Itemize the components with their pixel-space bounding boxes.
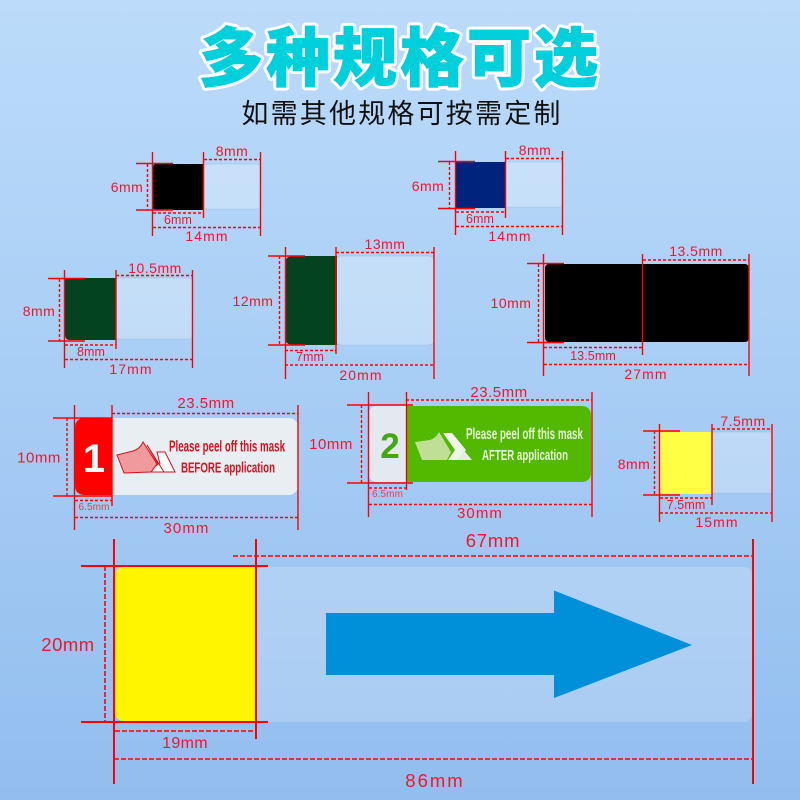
sticker: 30mm green peel label: Please peel off this mask: [466, 426, 583, 443]
sticker: 30mm red peel label: 1: [83, 437, 105, 481]
sticker: 86mm large with arrow: 20mm: [41, 634, 95, 655]
title: 多种规格可选: [199, 23, 601, 95]
sticker: 30mm green peel label: AFTER application: [482, 447, 568, 464]
sticker: 27mm black: [491, 243, 749, 382]
sticker: 30mm green peel label: [309, 384, 592, 522]
sticker: 27mm black: 13.5mm: [570, 349, 616, 363]
sticker: 20mm green: 13mm: [365, 236, 405, 252]
sticker: 27mm black: 10mm: [491, 295, 531, 311]
sticker: 20mm green: [233, 236, 434, 383]
sticker: 14mm navy: 14mm: [488, 228, 532, 244]
sticker: 27mm black: 13.5mm: [669, 243, 723, 259]
title: 多种规格可选: [199, 23, 601, 95]
sticker: 14mm black: 8mm: [216, 143, 248, 159]
sticker: 30mm red peel label: 30mm: [163, 520, 210, 537]
sticker: 14mm black: 6mm: [111, 179, 143, 195]
sticker: 17mm green: 8mm: [77, 345, 105, 359]
sticker: 30mm red peel label: [17, 395, 298, 537]
sticker: 86mm large with arrow: 86mm: [405, 770, 465, 791]
sticker: 30mm green peel label: 2: [380, 427, 400, 466]
sticker: 30mm green peel label: 6.5mm: [372, 489, 403, 500]
sticker: 14mm navy: 6mm: [412, 178, 444, 194]
sticker: 86mm large with arrow: 67mm: [466, 530, 520, 551]
sticker: 20mm green: 7mm: [296, 350, 324, 364]
sticker: 30mm red peel label: 23.5mm: [177, 395, 235, 412]
subtitle: 如需其他规格可按需定制: [241, 99, 563, 129]
sticker: 27mm black: 27mm: [624, 366, 668, 382]
sticker: 20mm green: 12mm: [233, 293, 273, 309]
sticker: 86mm large with arrow: [41, 530, 753, 791]
sticker: 15mm yellow: [618, 413, 772, 530]
sticker: 14mm navy: 6mm: [466, 212, 494, 226]
sticker: 15mm yellow: 7.5mm: [720, 413, 766, 429]
sticker: 14mm black: [111, 143, 260, 244]
sticker: 15mm yellow: 7.5mm: [667, 498, 705, 512]
sticker: 30mm red peel label: 10mm: [17, 450, 61, 466]
sticker: 17mm green: 8mm: [23, 303, 55, 319]
sticker: 15mm yellow: 15mm: [695, 514, 739, 530]
sticker: 20mm green: 20mm: [339, 367, 383, 383]
sticker: 30mm green peel label: 23.5mm: [470, 384, 528, 401]
sticker: 30mm green peel label: 30mm: [457, 505, 503, 522]
sticker: 17mm green: [23, 260, 192, 377]
sticker: 14mm black: 6mm: [164, 213, 192, 227]
sticker: 14mm navy: 8mm: [519, 142, 551, 158]
sticker: 14mm navy: [412, 142, 562, 244]
sticker: 86mm large with arrow: 19mm: [162, 735, 208, 752]
sticker: 30mm red peel label: Please peel off this mask: [169, 438, 285, 456]
sticker: 17mm green: 10.5mm: [128, 260, 182, 276]
icon: peeling sheets, green: [415, 432, 472, 460]
sticker: 30mm green peel label: 10mm: [309, 436, 353, 453]
icon: peeling sheets, red: [117, 442, 175, 473]
sticker: 17mm green: 17mm: [109, 361, 153, 377]
sticker: 30mm red peel label: 6.5mm: [78, 502, 110, 513]
sticker: 14mm black: 14mm: [185, 228, 229, 244]
icon: blue arrow: [326, 590, 692, 698]
sticker: 30mm red peel label: BEFORE application: [181, 460, 275, 476]
sticker: 15mm yellow: 8mm: [618, 456, 650, 472]
